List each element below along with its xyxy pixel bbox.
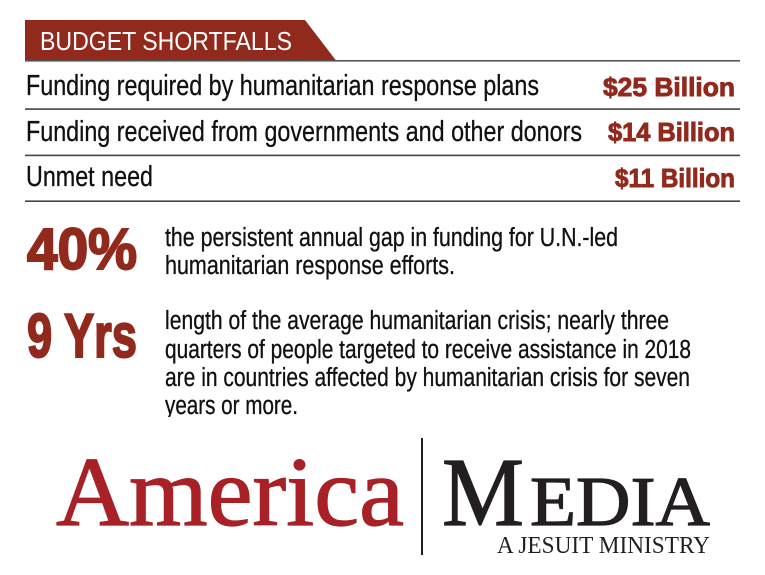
row: unmet need: $11 Billion xyxy=(615,163,735,193)
row: funding required: $25 Billion xyxy=(603,72,735,102)
logo: America Media: A JESUIT MINISTRY xyxy=(497,533,710,559)
budget table xyxy=(25,60,740,202)
stat: 40%: 40% xyxy=(27,217,137,282)
stat: 9 years: length of the average humanitarian crisis; nearly three xyxy=(165,307,669,335)
row: unmet need xyxy=(26,161,735,193)
banner: budget shortfalls: BUDGET SHORTFALLS xyxy=(40,26,292,56)
row: unmet need: Unmet need xyxy=(26,161,153,193)
banner: budget shortfalls xyxy=(25,20,336,60)
stat: 9 years: 9 Yrs xyxy=(27,302,137,371)
stat: 40%: the persistent annual gap in funding for U.N.-led xyxy=(165,224,618,252)
logo: America Media xyxy=(56,438,710,559)
logo: America Media: EDIA xyxy=(530,464,710,541)
stat: 40% xyxy=(27,217,618,282)
logo: America Media: America xyxy=(56,438,404,547)
stat: 9 years: years or more. xyxy=(165,392,298,420)
row: funding received: $14 Billion xyxy=(608,117,735,147)
row: funding received: Funding received from governments and other donors xyxy=(26,116,582,148)
stat: 9 years xyxy=(27,302,691,420)
stat: 40%: humanitarian response efforts. xyxy=(165,252,455,280)
logo: America Media: M xyxy=(442,439,524,546)
row: funding required: Funding required by humanitarian response plans xyxy=(26,70,539,102)
